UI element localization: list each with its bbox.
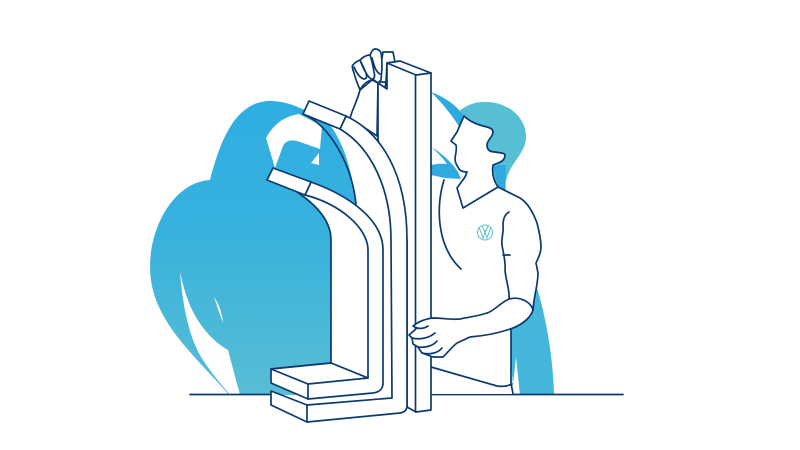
white fill behind lower band (297, 192, 368, 378)
curved structure (267, 61, 431, 422)
right blue shapes behind person (431, 92, 554, 395)
shirt side and hem (431, 330, 513, 394)
body fill (431, 116, 541, 394)
inner arc band (271, 182, 383, 399)
sleeve fold (502, 212, 510, 299)
top cap (303, 101, 346, 129)
fingers (412, 326, 442, 354)
raised arm (350, 80, 378, 136)
right teal head shape (460, 102, 526, 190)
collar (457, 177, 498, 208)
top of upper block (271, 363, 368, 384)
face and hair outline (451, 116, 505, 187)
forearm and gripping hand (409, 298, 533, 357)
column edges (387, 63, 431, 412)
inner arc of top band (303, 114, 356, 204)
shoulder and arm outline (498, 187, 541, 310)
chest fold (439, 180, 461, 269)
person (350, 49, 541, 394)
bottom lower block and outer arc band (271, 116, 407, 422)
left blue blob background (150, 101, 356, 395)
column (378, 61, 431, 412)
inner vertical edge (297, 192, 331, 363)
VW logo (478, 225, 492, 240)
raised hand (352, 49, 395, 90)
baseline (190, 394, 623, 396)
lower cap (267, 168, 311, 195)
